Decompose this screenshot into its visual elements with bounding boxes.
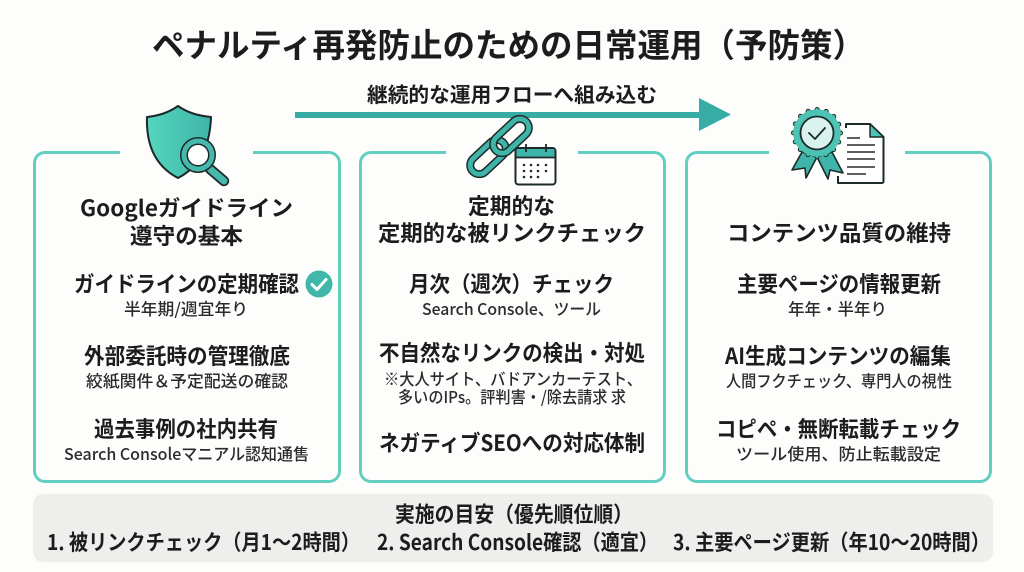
item: negative SEO response: ネガティブSEOへの対応体制 [379,426,645,458]
item: sharing past cases: Search Consoleマニアル認知通售 [64,441,309,465]
panel heading: コンテンツ品質の維持 [727,216,951,248]
panel heading: 定期的な [468,189,555,221]
icon: award ribbon and document [792,110,884,183]
panel outline [686,152,990,482]
priority 3: 3. 主要ページ更新（年10〜20時間） [673,526,990,557]
arrow shape [295,98,731,131]
item: monthly check: Search Console、ツール [422,296,601,320]
panel: content quality [686,110,990,482]
item: sharing past cases: 過去事例の社内共有 [94,412,278,444]
item: guideline review: 半年期/週宜年り [124,296,248,320]
panel outline [360,152,664,482]
item: key page updates [737,267,941,320]
item: AI content editing: AI生成コンテンツの編集 [724,339,951,371]
icon: check badge [306,270,332,298]
panel: Google guidelines [34,106,340,482]
item: key page updates: 主要ページの情報更新 [737,267,941,299]
item: sharing past cases [64,412,309,465]
title: ペナルティ再発防止のための日常運用（予防策） [152,19,865,67]
item: unnatural link detection: ※大人サイト、バドアンカーテスト、 [384,366,642,390]
panel heading: 遵守の基本 [130,219,243,251]
icon: shield with magnifier [147,106,224,181]
item: AI content editing: 人間フクチェック、専門人の視性 [726,368,952,392]
panel outline [34,152,340,482]
panel heading [378,189,646,248]
item: outsourcing management: 絞紙関件＆予定配送の確認 [86,368,289,392]
panel heading: Googleガイドライン [80,191,293,223]
item: guideline review [74,267,299,320]
flow arrow [295,78,731,131]
flow arrow label: 継続的な運用フローへ組み込む [367,78,657,108]
item: monthly check [409,267,614,320]
item: guideline review: ガイドラインの定期確認 [74,267,299,299]
item: key page updates: 年年・半年り [788,296,887,320]
item: unnatural link detection: 多いのIPs。評判害・/除去請求 求 [398,384,626,408]
item: AI content editing [724,339,952,392]
guide background [33,494,993,562]
priority 2: 2. Search Console確認（適宜） [377,526,658,557]
panel heading [80,191,293,251]
item: unnatural link detection [379,336,645,408]
item: unnatural link detection: 不自然なリンクの検出・対処 [379,336,645,368]
panel: backlink check [360,115,664,481]
item: outsourcing management [84,339,290,392]
item: copy check: コピペ・無断転載チェック [716,412,961,444]
priority 1: 1. 被リンクチェック（月1〜2時間） [47,526,360,557]
icon: chain link and calendar [467,115,556,184]
guide heading: 実施の目安（優先順位順） [395,498,633,529]
item: copy check: ツール使用、防止転載設定 [736,441,941,465]
panel heading: 定期的な被リンクチェック [378,216,646,248]
panel: implementation guide [33,494,993,562]
item: copy check [716,412,961,465]
item: outsourcing management: 外部委託時の管理徹底 [84,339,290,371]
item: monthly check: 月次（週次）チェック [409,267,614,299]
